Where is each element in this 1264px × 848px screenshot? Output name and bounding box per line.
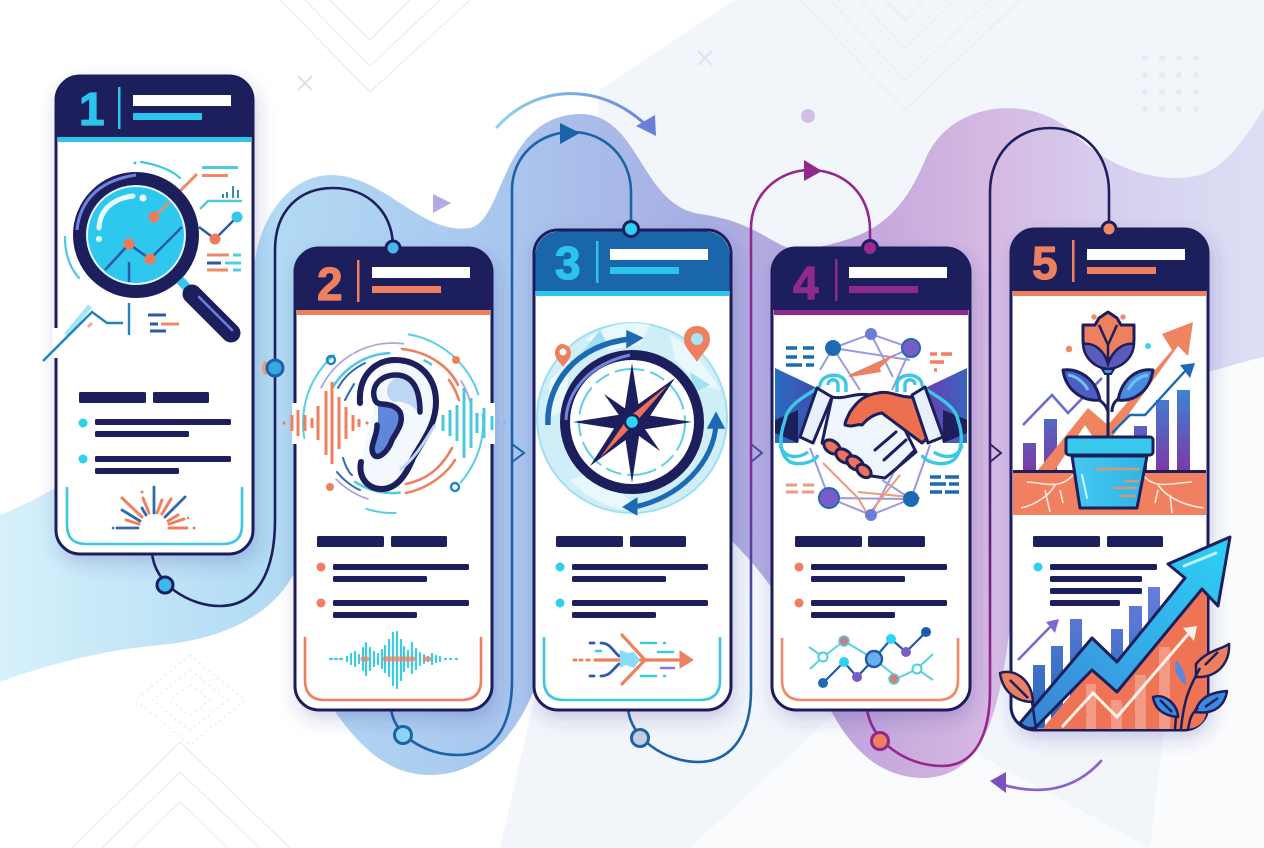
card 5 header: 5 <box>1032 237 1058 289</box>
converging arrows mini graphic <box>544 635 720 700</box>
icon: handshake with network <box>775 328 967 521</box>
timeline nodes <box>157 222 1116 750</box>
decorative dot <box>801 109 815 123</box>
text placeholders card 3 <box>556 536 708 618</box>
card 2 frame <box>295 248 492 710</box>
card 5 <box>1000 229 1230 730</box>
card 2 <box>270 248 516 710</box>
flowing colour blob <box>0 108 1264 778</box>
text placeholders card 5 <box>1033 536 1163 606</box>
background chevron patterns <box>72 0 1020 848</box>
card 4 header: 4 <box>793 257 819 309</box>
card 5 frame <box>1011 229 1208 730</box>
text placeholders card 1 <box>78 392 231 474</box>
card 3 header: 3 <box>555 237 581 289</box>
card 3 <box>534 230 731 710</box>
card 1 frame <box>56 76 253 554</box>
card 4 frame <box>772 248 970 710</box>
arrowheads on connectors <box>512 123 1001 462</box>
card 5 header <box>1011 229 1208 296</box>
decorative arc arrow top <box>497 94 656 136</box>
network line mini graphic <box>782 627 958 700</box>
icon: ear with sound waves <box>270 300 516 546</box>
card 3 header <box>536 232 730 296</box>
dot diamond bottom left <box>135 655 245 745</box>
card 4 header <box>772 248 970 315</box>
card 1 header <box>56 76 253 142</box>
card 4 <box>772 248 970 710</box>
decorative triangle <box>433 194 451 213</box>
text placeholders card 2 <box>316 536 469 618</box>
card 1 <box>43 76 253 554</box>
card 3 frame <box>534 230 731 710</box>
card 2 header: 2 <box>317 258 343 310</box>
connector: step 1 to 2 <box>152 188 393 606</box>
dot grid top right <box>1142 55 1199 112</box>
card 2 header <box>295 248 492 315</box>
icon: magnifying glass with chart <box>43 162 242 361</box>
decorative arc arrow bottom <box>990 761 1101 793</box>
connector: step 2 to 3 <box>391 132 631 755</box>
text placeholders card 4 <box>794 536 947 618</box>
icon: rising arrow and bars <box>1000 537 1230 729</box>
waveform mini graphic <box>305 632 481 700</box>
icon: compass on globe <box>537 323 727 515</box>
sunburst mini graphic <box>67 487 242 544</box>
card 1 header: 1 <box>79 83 105 135</box>
icon: plant growing in pot with chart <box>1013 312 1206 515</box>
connector: step 4 to 5 <box>867 128 1109 766</box>
connector: step 3 to 4 <box>628 170 870 762</box>
